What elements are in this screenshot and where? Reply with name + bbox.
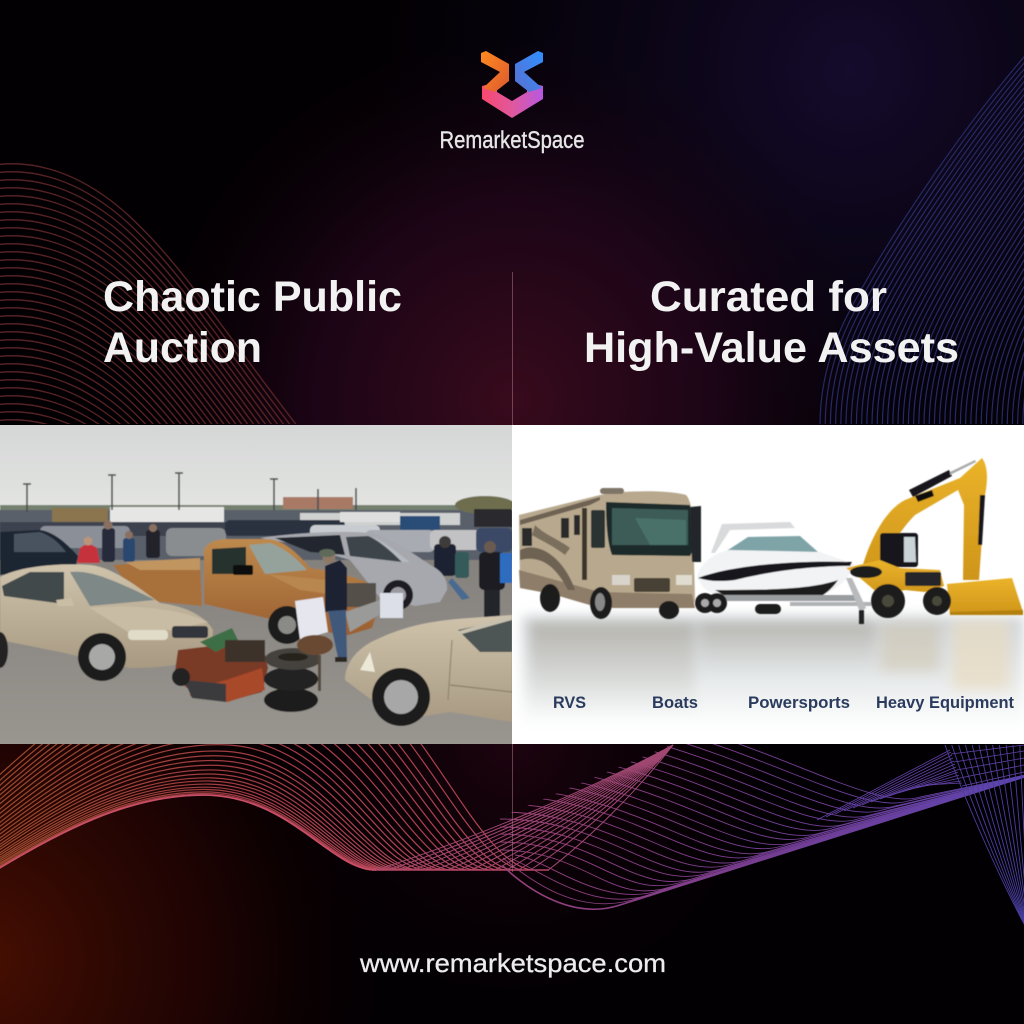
background cars	[0, 512, 512, 556]
boat on trailer	[695, 522, 876, 624]
asset labels	[554, 696, 1014, 712]
crowd	[77, 520, 512, 620]
line wave: mesh rising from flat	[376, 745, 673, 870]
rusty pickup truck	[113, 539, 380, 644]
line wave: bottom right blue fan	[945, 745, 1024, 935]
logo icon	[481, 51, 543, 118]
asset labels: Heavy Equipment	[876, 694, 1014, 712]
brand name: RemarketSpace	[440, 127, 584, 154]
beige sedan left	[0, 564, 213, 681]
excavator	[862, 458, 1023, 615]
silver van	[260, 532, 447, 610]
heading: right	[584, 273, 959, 372]
horizon buildings	[0, 496, 515, 530]
center divider	[512, 272, 514, 872]
powersports ATV	[846, 533, 951, 618]
photo panel: curated high-value assets	[512, 425, 1024, 744]
asset labels: Powersports	[748, 694, 850, 712]
heading: right: High-Value Assets	[584, 324, 959, 372]
footer website: www.remarketspace.com	[359, 948, 666, 978]
heading: left	[103, 273, 402, 372]
light poles	[23, 473, 356, 512]
asset labels: RVS	[553, 694, 586, 712]
auction sign boards	[295, 593, 403, 691]
asset labels: Boats	[652, 694, 698, 712]
beige sedan right	[345, 615, 512, 726]
heading: right: Curated for	[650, 273, 887, 321]
photo panel: chaotic auction lot	[0, 420, 517, 750]
dark suv	[0, 530, 78, 575]
line wave: top left red	[0, 163, 296, 424]
heading: left: Chaotic Public	[103, 273, 402, 321]
stacked tires	[264, 648, 321, 712]
line wave: bottom purple ribbon	[500, 744, 1024, 910]
heading: left: Auction	[103, 324, 262, 372]
standing man	[319, 549, 347, 662]
lawn mower junk	[172, 628, 268, 702]
motorhome RV	[519, 488, 701, 619]
line wave: top right blue	[820, 50, 1024, 425]
glossy floor and reflections	[522, 616, 1024, 728]
line wave: bottom red ribbon	[0, 744, 549, 871]
